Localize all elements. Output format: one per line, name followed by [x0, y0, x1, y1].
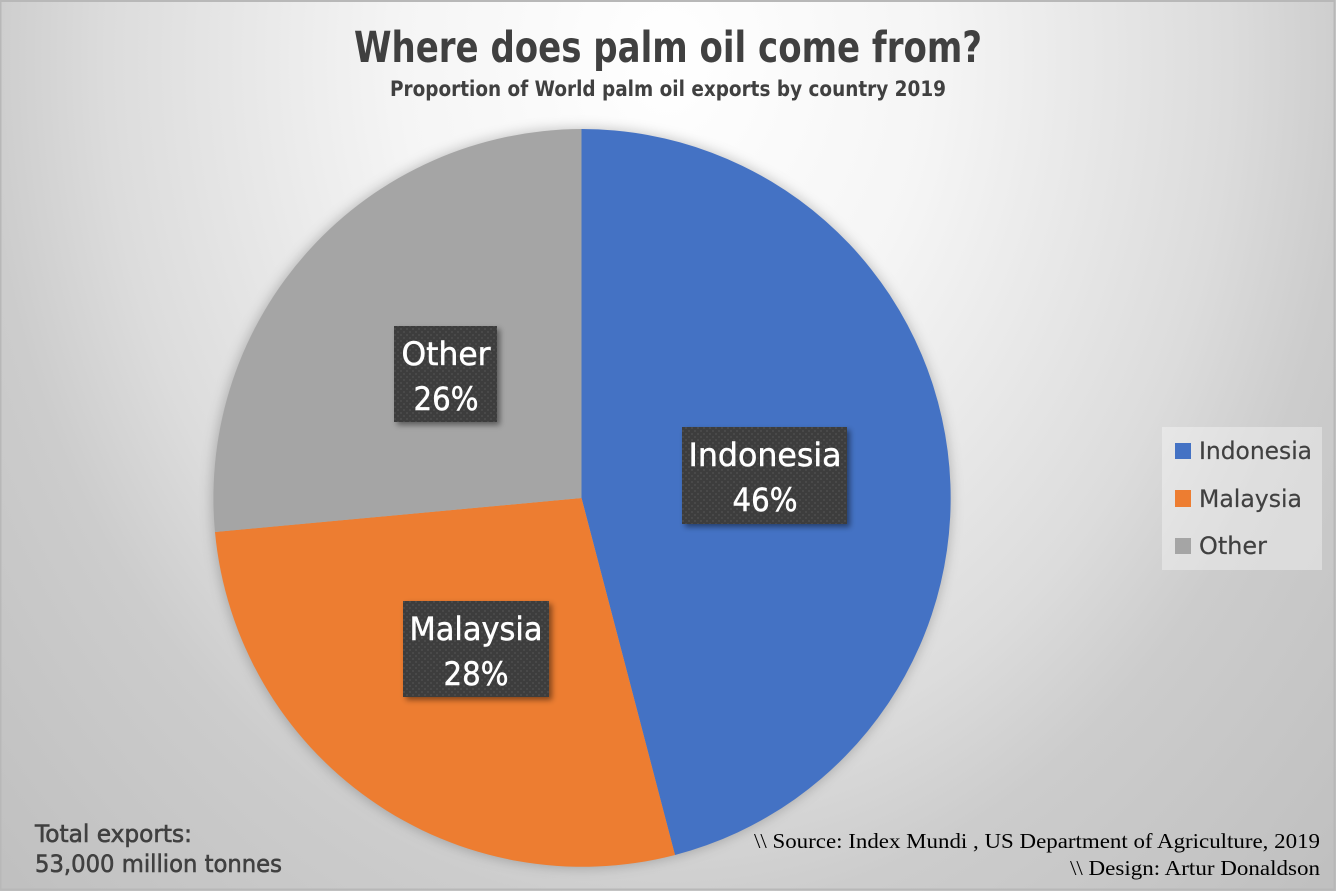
- legend: [1162, 427, 1322, 570]
- data label: Other 26%: Other: [402, 335, 491, 373]
- data label: Indonesia 46%: Indonesia: [688, 436, 842, 474]
- pie chart: [212, 128, 952, 868]
- data label: Indonesia 46%: 46%: [732, 481, 798, 519]
- data label: Malaysia 28%: 28%: [444, 655, 508, 693]
- total exports note: 53,000 million tonnes: [35, 850, 282, 878]
- slice: Malaysia 28%: [215, 498, 675, 867]
- slice: Other 26%: [213, 129, 581, 532]
- data label: Malaysia 28%: Malaysia: [410, 610, 542, 648]
- total exports note: [34, 820, 282, 878]
- slice: Indonesia 46%: [582, 129, 951, 855]
- subtitle: Proportion of World palm oil exports by country 2019: [390, 77, 946, 101]
- data label: Other 26%: 26%: [414, 380, 478, 418]
- data label: Other 26%: [394, 326, 497, 422]
- data label: Indonesia 46%: [682, 427, 847, 524]
- legend item: Indonesia: Indonesia: [1199, 437, 1312, 465]
- title: Where does palm oil come from?: [354, 23, 982, 73]
- data label: Malaysia 28%: [403, 601, 549, 697]
- source and design credit: \\ Source: Index Mundi , US Department of Agriculture, 2019: [754, 829, 1320, 853]
- legend item: Other: Other: [1199, 532, 1267, 560]
- source and design credit: \\ Design: Artur Donaldson: [1070, 856, 1321, 880]
- legend item: Malaysia: Malaysia: [1199, 485, 1302, 513]
- total exports note: Total exports:: [34, 820, 192, 848]
- source and design credit: [754, 829, 1321, 880]
